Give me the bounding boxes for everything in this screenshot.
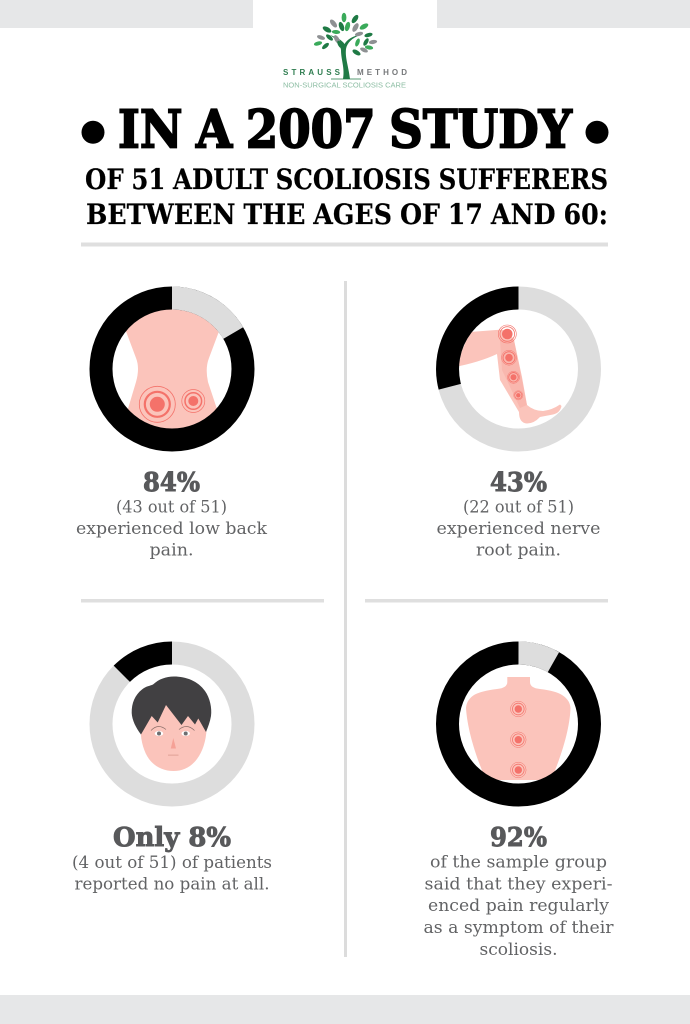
description: said that they experi-: [424, 874, 612, 894]
logo wordmark: STRAUSS: [283, 68, 341, 77]
icon: pain spot middle: [510, 732, 526, 748]
icon: pain spot 2: [502, 350, 516, 365]
description: [436, 497, 600, 561]
description: (22 out of 51): [463, 497, 574, 517]
bottom band: [0, 995, 690, 1024]
donut chart 8%: [101, 653, 243, 795]
description: reported no pain at all.: [74, 874, 270, 894]
title: [82, 100, 608, 161]
description: [76, 497, 268, 561]
subtitle: [85, 163, 608, 231]
description: (43 out of 51): [116, 497, 227, 517]
panel: low back pain: [76, 298, 268, 561]
eyes: [151, 726, 194, 736]
nose: [171, 738, 176, 748]
icon: nerve path shading: [500, 340, 527, 408]
description: scoliosis.: [480, 940, 558, 960]
icon: tree: [313, 13, 377, 79]
title text: IN A 2007 STUDY: [118, 100, 573, 161]
panel: regular pain: [424, 653, 614, 960]
description: [424, 852, 614, 960]
icon: upper back: [466, 677, 570, 780]
top band left: [0, 0, 253, 28]
icon: pain spot 1: [498, 325, 516, 343]
logo tagline: NON-SURGICAL SCOLIOSIS CARE: [283, 82, 406, 90]
icon: lower back torso: [126, 308, 220, 440]
mouth: [168, 754, 178, 756]
icon: pain spot large: [139, 386, 175, 422]
stat 43%: 43%: [490, 468, 547, 498]
description: (4 out of 51) of patients: [72, 853, 272, 873]
donut chart 84%: [101, 298, 243, 440]
description: enced pain regularly: [428, 896, 609, 916]
icon: pain spot 4: [514, 391, 523, 400]
icon: leg: [455, 330, 562, 424]
icon: pain spot small: [182, 390, 205, 412]
top band right: [437, 0, 690, 28]
description: of the sample group: [430, 852, 607, 872]
icon: pain spot upper: [510, 701, 526, 717]
stat 84%: 84%: [143, 468, 200, 498]
stat only 8%: Only 8%: [113, 823, 231, 853]
logo: Strauss Method: [283, 13, 407, 90]
donut chart 43%: [448, 298, 590, 440]
logo wordmark second word: METHOD: [357, 68, 407, 77]
panel: nerve root pain: [436, 298, 600, 561]
icon: pain spot lower: [510, 762, 526, 778]
bullet right: [586, 121, 608, 144]
description: root pain.: [476, 541, 561, 561]
description: experienced low back: [76, 519, 268, 539]
description: as a symptom of their: [424, 918, 614, 938]
description: [72, 853, 272, 894]
donut chart 92%: [448, 653, 590, 795]
description: pain.: [150, 541, 194, 561]
subtitle line 1: OF 51 ADULT SCOLIOSIS SUFFERERS: [85, 163, 608, 196]
panel: no pain: [72, 653, 272, 894]
icon: face: [132, 676, 211, 771]
description: experienced nerve: [436, 519, 600, 539]
bullet left: [82, 121, 104, 144]
icon: pain spot 3: [508, 371, 520, 383]
subtitle line 2: BETWEEN THE AGES OF 17 AND 60:: [86, 198, 608, 231]
stat 92%: 92%: [490, 823, 547, 853]
